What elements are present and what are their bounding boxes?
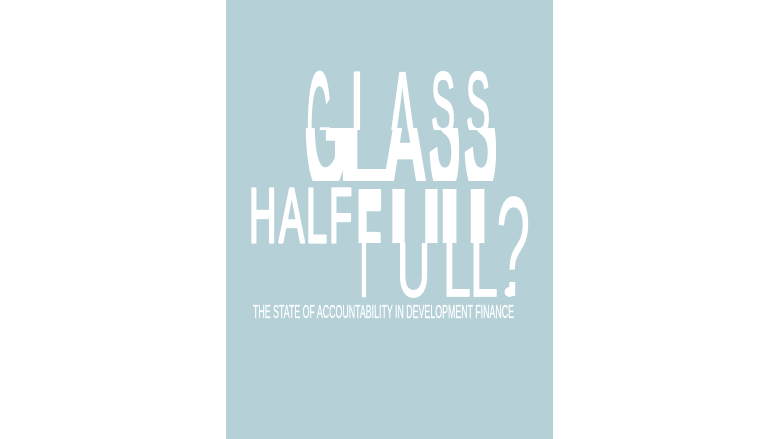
title: FULL bold upper half: U (389, 158, 441, 315)
title: GLASS bold lower half: L (339, 104, 388, 199)
title: GLASS thin upper half: S (431, 54, 455, 155)
title: GLASS bold lower half: S (464, 9, 497, 233)
title: HALF: A (279, 172, 305, 258)
title: FULL thin lower half (362, 243, 497, 298)
title: FULL thin lower half: F (359, 114, 383, 339)
title: GLASS bold lower half (306, 128, 496, 181)
title: FULL bold upper half (358, 189, 484, 243)
title: HALF: H (249, 172, 276, 258)
title: GLASS bold lower half: G (304, 10, 346, 234)
title: GLASS thin upper half: L (350, 51, 378, 164)
title: HALF: F (329, 172, 352, 258)
cover illustration (226, 0, 553, 439)
title: HALF (249, 172, 352, 258)
title: question mark: ? (496, 168, 530, 327)
title: GLASS thin upper half: S (466, 54, 490, 155)
panel: pale blue cover (226, 0, 553, 439)
title: GLASS thin upper half (308, 70, 489, 130)
title: FULL bold upper half: L (438, 160, 487, 316)
title: GLASS thin upper half: A (384, 40, 421, 218)
cover illustration: THE STATE OF ACCOUNTABILITY IN DEVELOPMENT FINANCE (253, 302, 514, 322)
title: GLASS bold lower half: A (383, 63, 427, 209)
title: FULL thin lower half: L (470, 225, 498, 314)
title: FULL thin lower half: L (443, 225, 471, 314)
title: HALF: L (306, 172, 327, 258)
title: FULL thin lower half: U (397, 224, 430, 313)
title: FULL bold upper half: L (466, 160, 515, 316)
title: GLASS thin upper half: G (306, 40, 332, 219)
title: FULL bold upper half: F (357, 164, 381, 315)
title: GLASS bold lower half: S (429, 8, 460, 233)
